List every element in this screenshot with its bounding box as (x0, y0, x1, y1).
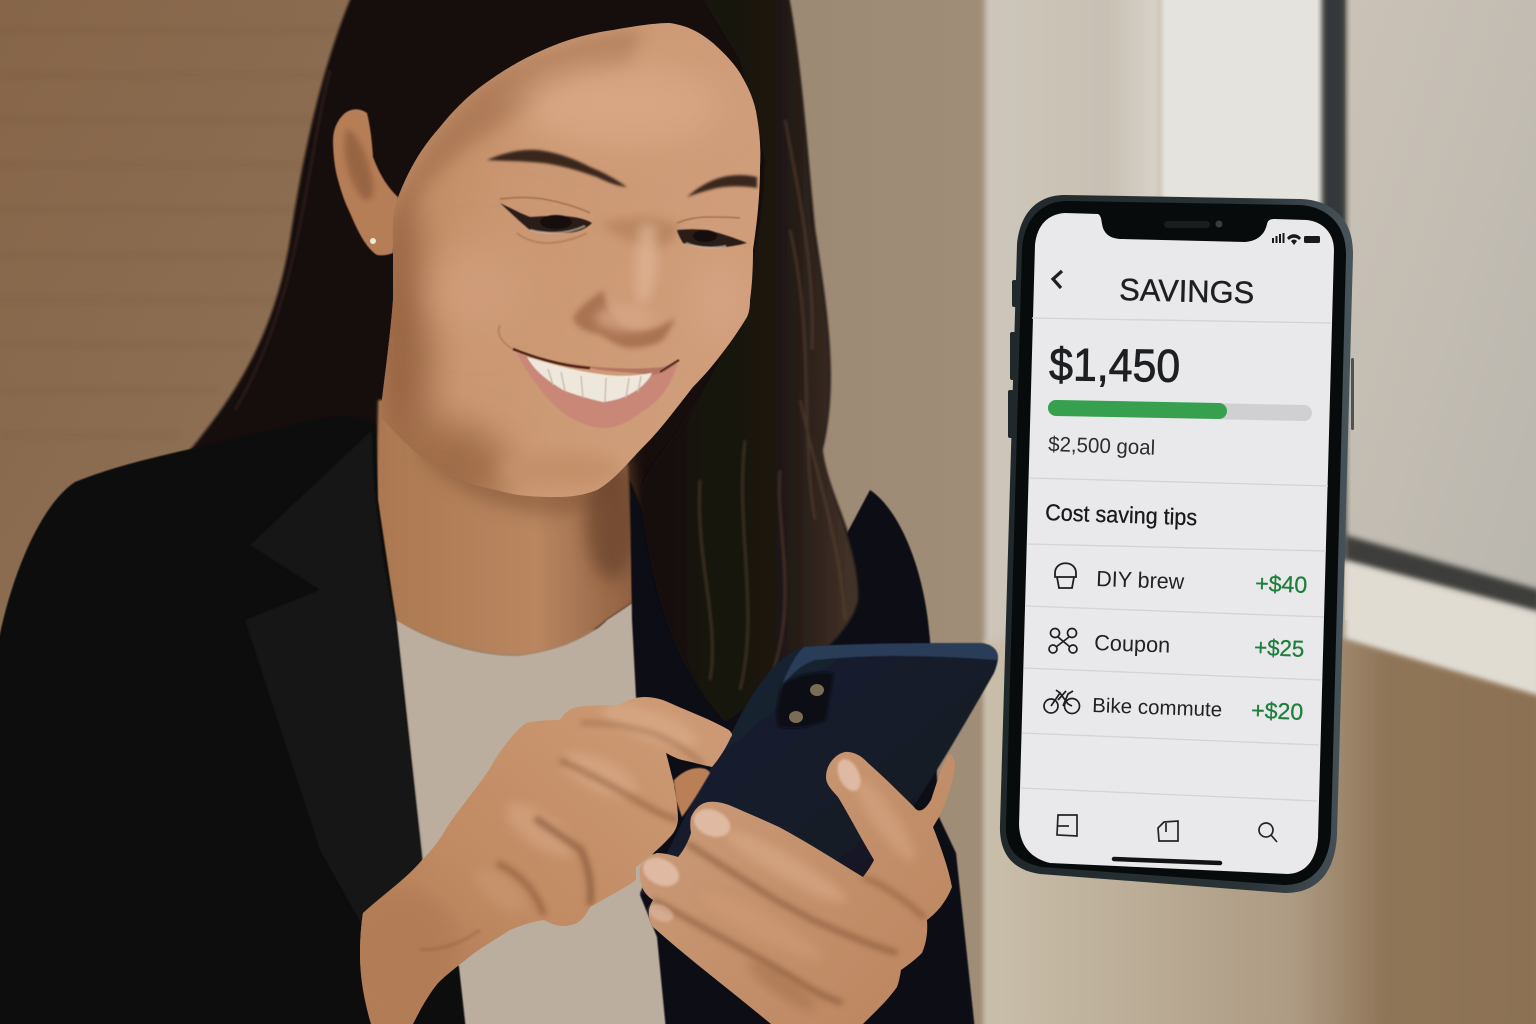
phone body (1000, 195, 1353, 893)
jacket right (630, 480, 975, 1024)
tip row: Bike commute: +$20 (1251, 697, 1304, 725)
smile (499, 325, 679, 428)
right eye (677, 217, 747, 248)
phone black bezel (1006, 201, 1346, 885)
held phone back (640, 643, 998, 935)
neck and upper chest (376, 400, 634, 655)
nose (573, 225, 675, 348)
phone screen (1019, 213, 1334, 874)
jacket left (0, 416, 466, 1024)
floating phone mockup (1000, 195, 1354, 893)
cupped hand (360, 697, 732, 1024)
left eye (500, 198, 592, 243)
holding hand (630, 745, 970, 1024)
icon: book tab (1158, 821, 1178, 841)
phone camera (777, 672, 834, 728)
hair strand highlights (235, 70, 845, 690)
jacket lapel (245, 430, 422, 925)
icon: bike (1044, 690, 1080, 714)
icon: cup (1055, 563, 1076, 588)
ear inner shadow (344, 128, 374, 200)
icon: document tab (1057, 815, 1077, 836)
eyebrows (487, 150, 757, 197)
tip row: DIY brew: +$40 (1255, 570, 1308, 598)
tip row: Bike commute: Bike commute (1092, 694, 1223, 722)
progress bar (1056, 408, 1304, 413)
notch speaker and camera (1164, 220, 1222, 228)
tip row: DIY brew (1055, 563, 1308, 598)
goal label: $2,500 goal (1048, 433, 1156, 460)
tip row: Coupon (1049, 628, 1305, 662)
tip row: Bike commute (1044, 690, 1304, 725)
savings amount: $1,450 (1049, 338, 1181, 392)
section heading: Cost saving tips (1045, 499, 1198, 530)
woman (0, 0, 998, 1024)
tip row: DIY brew: DIY brew (1096, 566, 1185, 594)
face (382, 23, 760, 497)
ear (333, 109, 398, 255)
earring (370, 238, 376, 244)
hair front strands (640, 0, 858, 722)
home indicator (1114, 859, 1220, 863)
tip row: Coupon: +$25 (1254, 634, 1305, 662)
icon: crossed coupon (1049, 628, 1077, 653)
shirt (396, 602, 670, 1024)
tip row: Coupon: Coupon (1094, 630, 1171, 658)
neck side shadow (586, 460, 638, 580)
status icons (1272, 233, 1320, 245)
hair back (190, 0, 858, 722)
back arrow (1053, 271, 1062, 288)
tab bar icons (1057, 815, 1277, 842)
screen title: SAVINGS (1119, 272, 1255, 310)
icon: search tab (1259, 823, 1277, 842)
chin shadow on neck (420, 400, 632, 515)
lower finger of pointing hand (674, 768, 710, 817)
side buttons (1008, 280, 1354, 438)
fingernails (638, 755, 865, 926)
